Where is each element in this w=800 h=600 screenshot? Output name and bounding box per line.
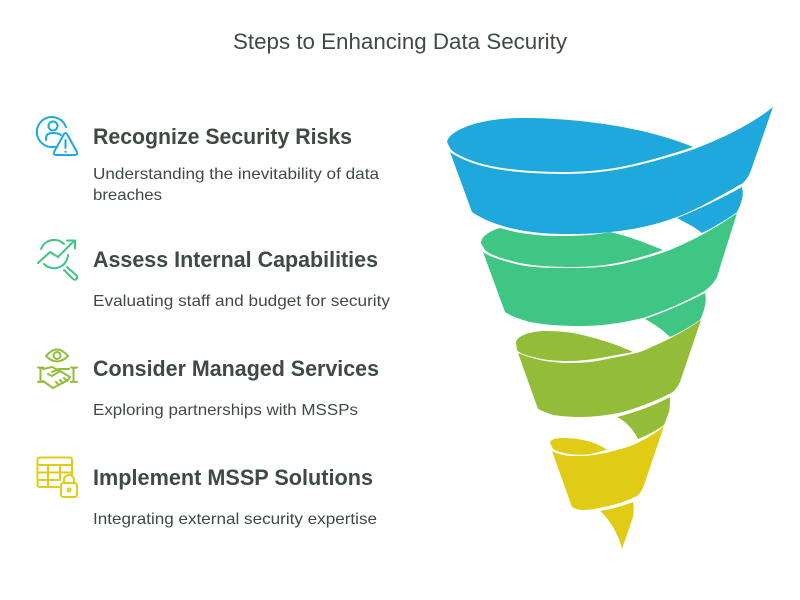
funnel spiral (447, 107, 773, 549)
description: Integrating external security expertise (93, 511, 377, 528)
icon: magnifier with rising arrow (38, 240, 77, 280)
description: Exploring partnerships with MSSPs (93, 402, 358, 419)
step 3: consider managed services (38, 350, 379, 419)
description: Understanding the inevitability of data (93, 166, 379, 183)
icon: table with padlock (38, 458, 77, 497)
heading: Consider Managed Services (93, 356, 379, 381)
green funnel section (481, 213, 737, 337)
blue funnel section (447, 107, 773, 234)
description: Evaluating staff and budget for security (93, 293, 390, 310)
title: Steps to Enhancing Data Security (233, 29, 567, 54)
description (93, 166, 379, 204)
heading: Recognize Security Risks (93, 124, 352, 149)
step 1: recognize security risks (37, 117, 379, 204)
icon: eye over handshake (38, 350, 77, 388)
step 4: implement MSSP solutions (38, 458, 377, 528)
olive funnel section (516, 320, 701, 439)
heading: Implement MSSP Solutions (93, 465, 373, 490)
heading: Assess Internal Capabilities (93, 247, 378, 272)
description: breaches (93, 187, 162, 204)
yellow funnel section (550, 426, 664, 549)
icon: user with warning triangle (37, 117, 77, 155)
step 2: assess internal capabilities (38, 240, 390, 310)
